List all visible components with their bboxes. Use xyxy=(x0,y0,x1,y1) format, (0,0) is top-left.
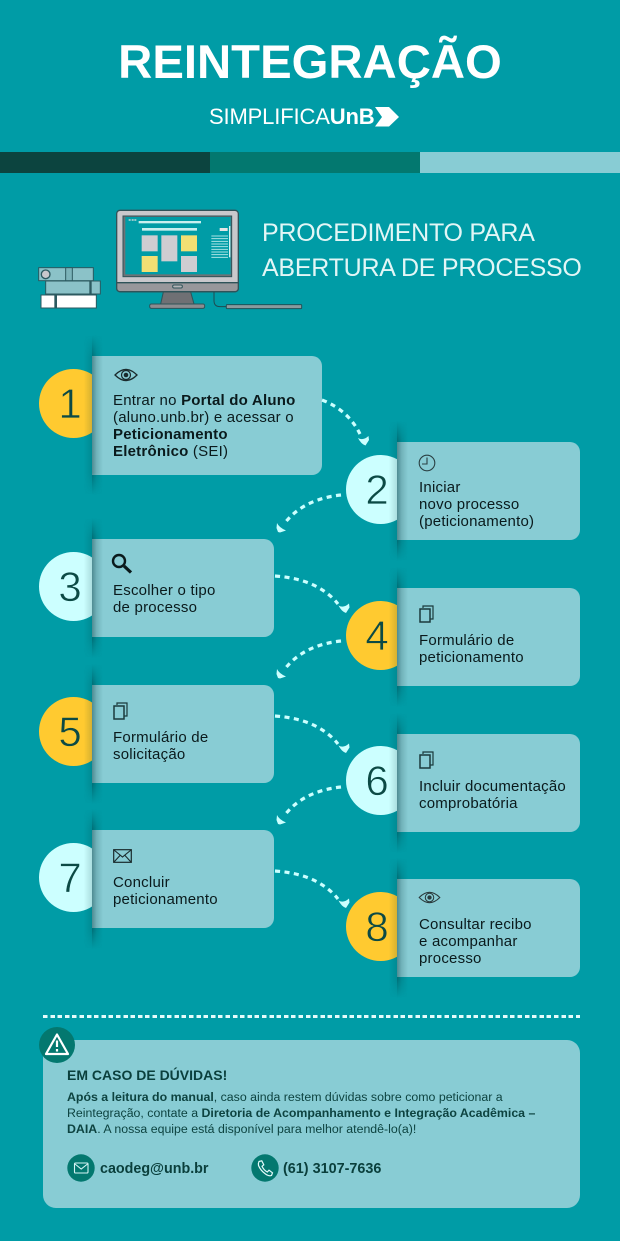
step 2 text: Iniciar xyxy=(419,479,461,496)
step 1 text: Eletrônico (SEI) xyxy=(113,443,228,460)
step 8 text xyxy=(419,916,532,967)
body text: DAIA. A nossa equipe está disponível para melhor atendê-lo(a)! xyxy=(67,1122,416,1136)
step 6 text: comprobatória xyxy=(419,795,518,812)
step 7 number: 7 xyxy=(58,854,82,901)
step 3 text: de processo xyxy=(113,599,197,616)
step 1 text: Entrar no Portal do Aluno xyxy=(113,392,295,409)
step 8 number xyxy=(346,892,415,961)
step 5 number xyxy=(39,697,108,766)
step 6 number: 6 xyxy=(365,757,389,804)
step 4 text: Formulário de xyxy=(419,632,514,649)
step 2 card xyxy=(397,442,580,540)
step 6 card xyxy=(397,734,580,832)
panel: doubts xyxy=(43,1040,580,1208)
step 2 text: (peticionamento) xyxy=(419,513,534,530)
subtitle xyxy=(262,219,582,282)
step 5 text: Formulário de xyxy=(113,729,208,746)
step 6 text xyxy=(419,778,566,812)
step 4 text xyxy=(419,632,524,666)
step 3 text: Escolher o tipo xyxy=(113,582,216,599)
step 1 text xyxy=(113,392,295,460)
logo: SimplificaUnB: SIMPLIFICAUnB xyxy=(209,104,375,129)
step 8 number: 8 xyxy=(365,903,389,950)
step 7 text xyxy=(113,874,218,908)
step 2 number: 2 xyxy=(365,466,389,513)
email: caodeg@unb.br xyxy=(100,1161,208,1177)
icon: phone xyxy=(251,1154,279,1182)
title: REINTEGRAÇÃO xyxy=(118,36,502,89)
step 1 text: Peticionamento xyxy=(113,426,228,443)
step 5 text xyxy=(113,729,208,763)
step 2 number xyxy=(346,455,415,524)
step 2 text: novo processo xyxy=(419,496,519,513)
step 4 number xyxy=(346,601,415,670)
step 2 text xyxy=(419,479,534,530)
step 7 card xyxy=(92,830,274,928)
step 1 card xyxy=(92,356,322,475)
icon: documents xyxy=(419,751,434,769)
step 1 text: (aluno.unb.br) e acessar o xyxy=(113,409,294,426)
step 7 number xyxy=(39,843,108,912)
icon: clock xyxy=(418,454,436,472)
illustration: computer and books xyxy=(38,210,302,310)
step 6 number xyxy=(346,746,415,815)
colour bar xyxy=(0,152,620,173)
body text: Após a leitura do manual, caso ainda restem dúvidas sobre como peticionar a xyxy=(67,1090,503,1104)
step 4 text: peticionamento xyxy=(419,649,524,666)
step 6 text: Incluir documentação xyxy=(419,778,566,795)
body text xyxy=(67,1090,535,1136)
icon: warning xyxy=(39,1027,75,1063)
step 8 text: e acompanhar xyxy=(419,933,518,950)
body text: Reintegração, contate a Diretoria de Acompanhamento e Integração Acadêmica – xyxy=(67,1106,535,1120)
heading: EM CASO DE DÚVIDAS! xyxy=(67,1067,227,1083)
step 8 text: processo xyxy=(419,950,482,967)
step 4 card xyxy=(397,588,580,686)
step 4 number: 4 xyxy=(365,612,389,659)
icon: eye xyxy=(114,368,138,382)
icon: envelope xyxy=(113,849,132,863)
step 1 number xyxy=(39,369,108,438)
phone number: (61) 3107-7636 xyxy=(283,1161,381,1177)
step 3 text xyxy=(113,582,216,616)
step 8 card xyxy=(397,879,580,977)
step 1 number: 1 xyxy=(58,380,82,427)
step 5 number: 5 xyxy=(58,708,82,755)
step 7 text: Concluir xyxy=(113,874,170,891)
subtitle: PROCEDIMENTO PARA xyxy=(262,219,535,247)
icon: documents xyxy=(419,605,434,623)
step 3 card xyxy=(92,539,274,637)
subtitle: ABERTURA DE PROCESSO xyxy=(262,254,582,282)
icon: mail xyxy=(67,1154,95,1182)
icon: eye xyxy=(418,892,440,904)
icon: documents xyxy=(113,702,128,720)
step 8 text: Consultar recibo xyxy=(419,916,532,933)
step 3 number: 3 xyxy=(58,563,82,610)
step 3 number xyxy=(39,552,108,621)
dashed divider xyxy=(43,1015,580,1018)
step 5 card xyxy=(92,685,274,783)
icon: magnifier xyxy=(112,554,132,574)
step 7 text: peticionamento xyxy=(113,891,218,908)
step 5 text: solicitação xyxy=(113,746,185,763)
